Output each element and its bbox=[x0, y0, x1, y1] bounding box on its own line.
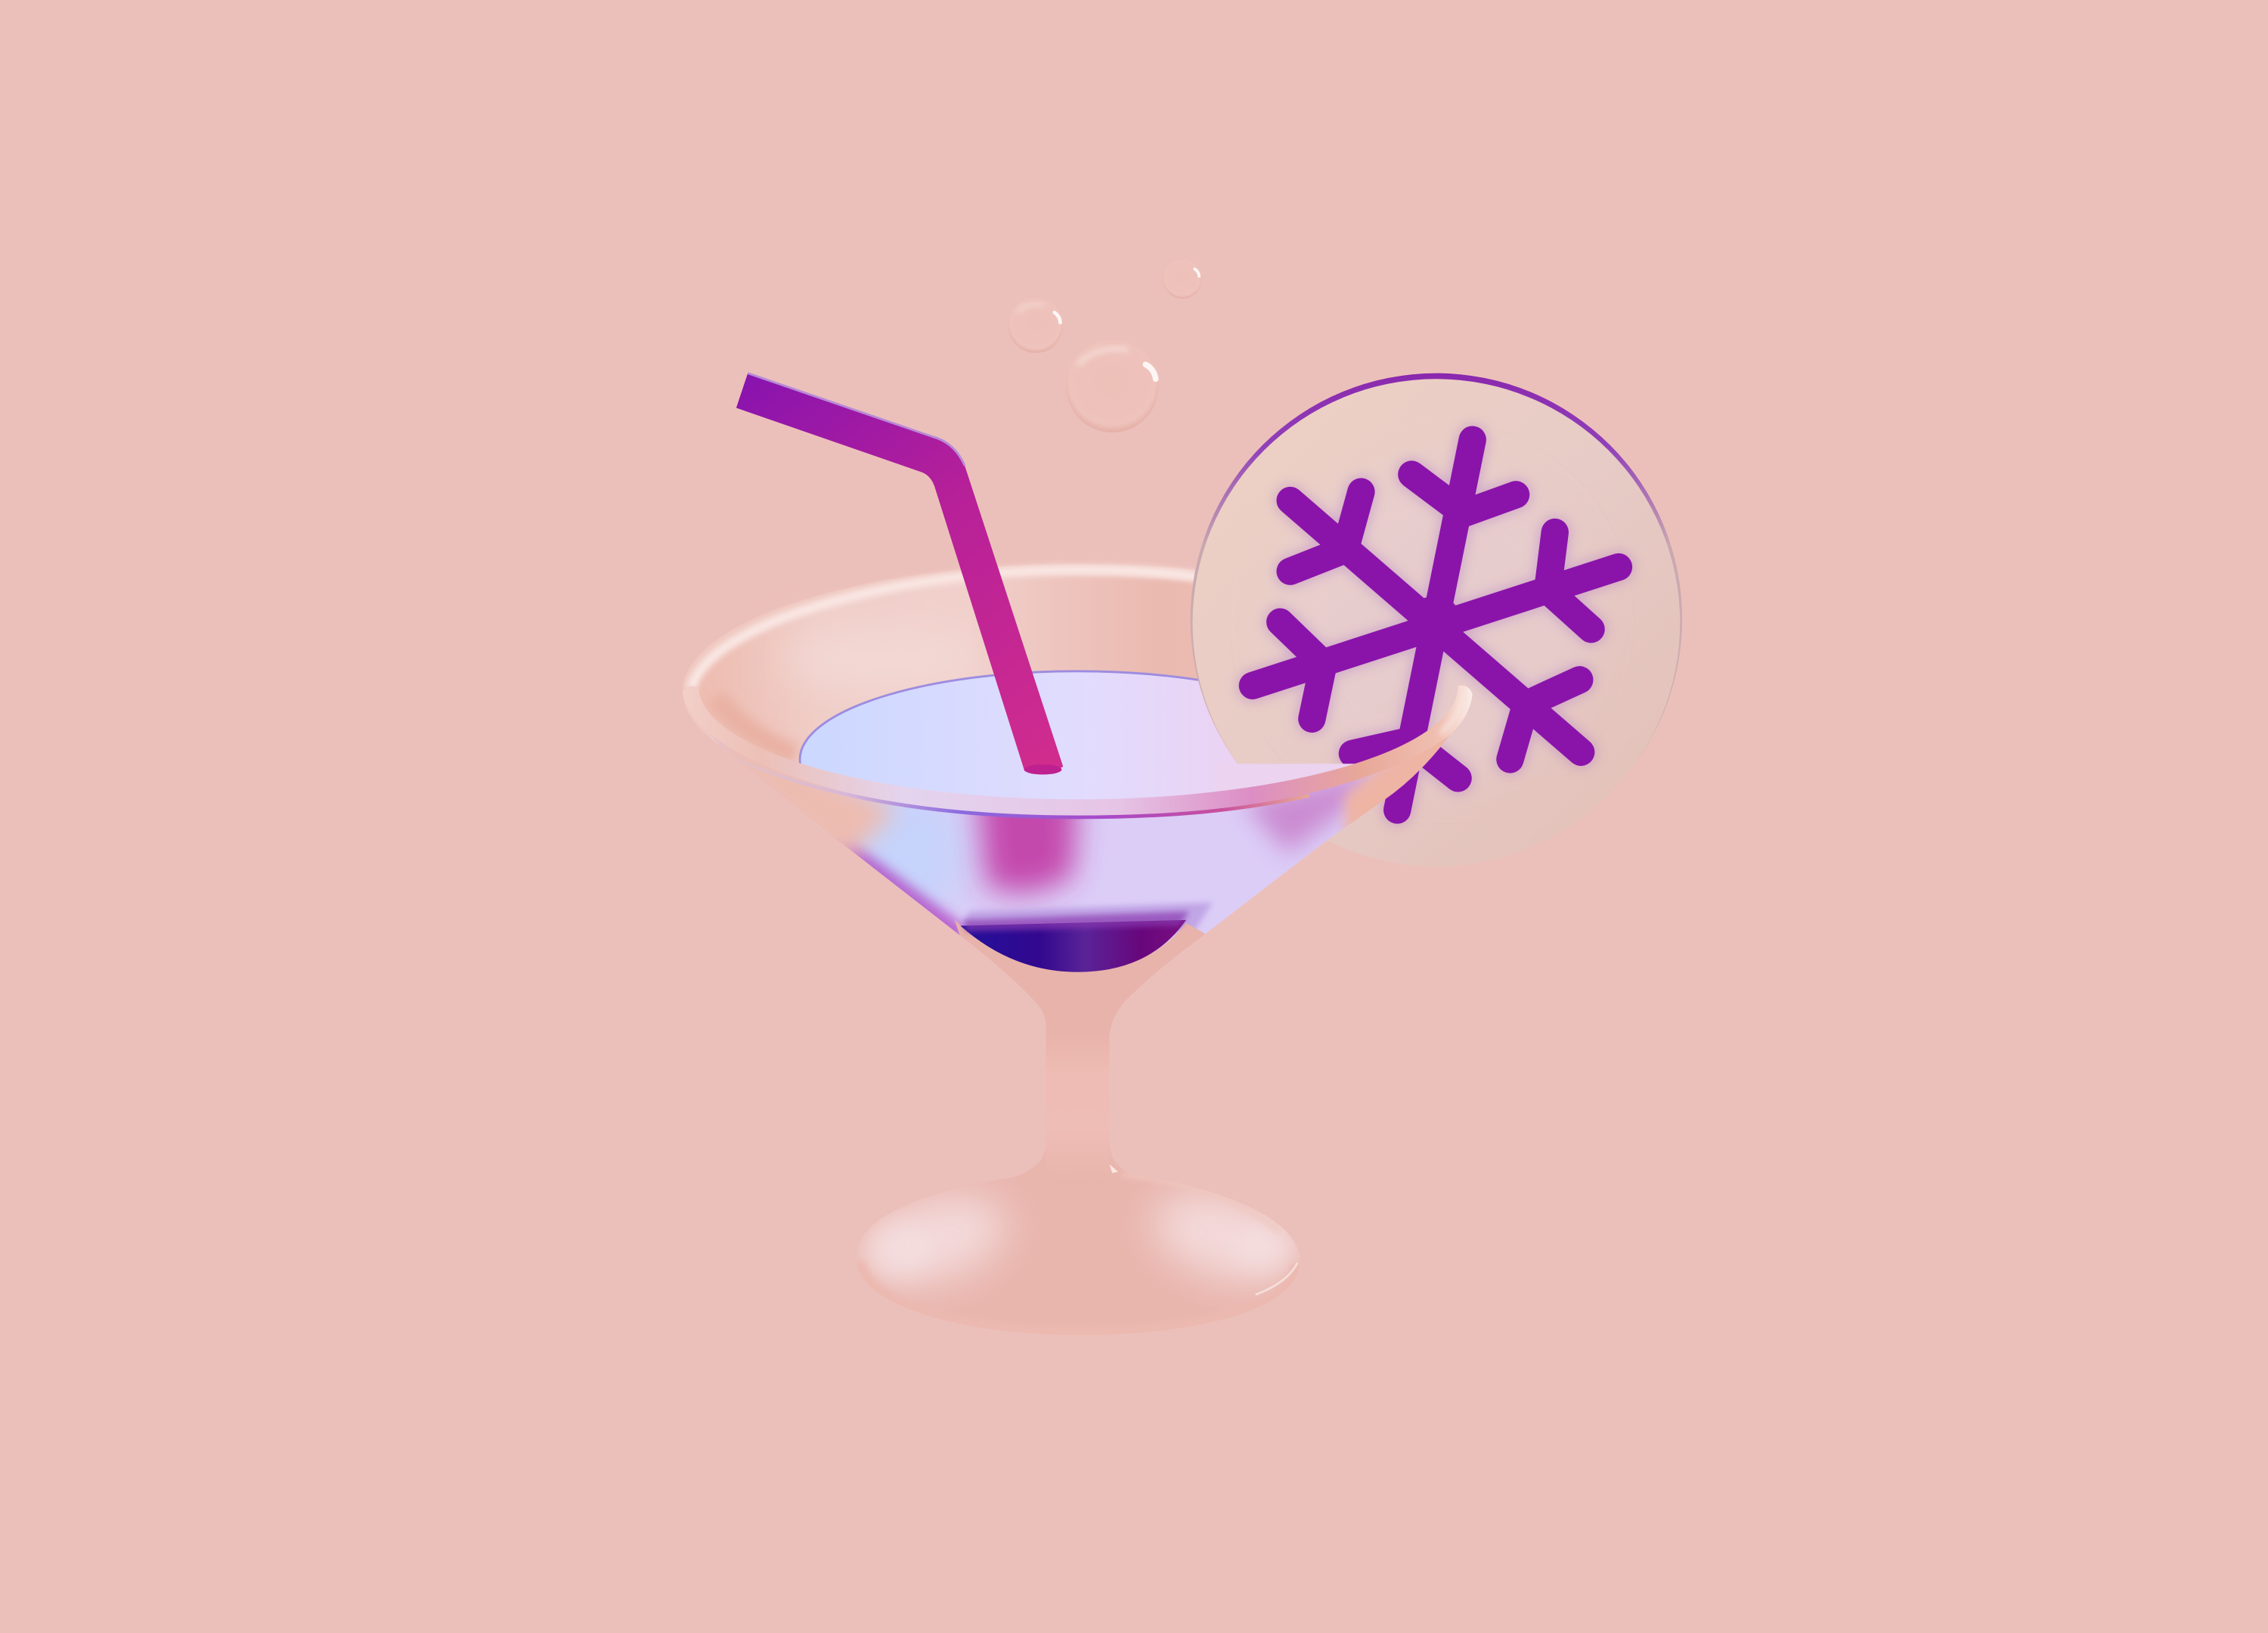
front rim of the glass bbox=[683, 686, 1473, 819]
bubble: medium bbox=[1009, 298, 1063, 353]
foot bbox=[858, 1146, 1299, 1335]
stem bbox=[1046, 1012, 1109, 1183]
cone: right edge tint bbox=[1244, 767, 1389, 854]
liquid surface covering disc bbox=[1237, 764, 1355, 786]
snowflake bbox=[1253, 440, 1619, 810]
cone: straw reflection bbox=[976, 781, 1077, 893]
liquid surface bbox=[798, 670, 1238, 800]
snowflake shadow bbox=[1253, 440, 1619, 810]
snowflake hub bbox=[1408, 596, 1462, 651]
cone: left edge tint bbox=[832, 839, 966, 940]
bowl inner wall bbox=[696, 575, 1459, 807]
cone: dark drink bbox=[960, 920, 1186, 972]
bubble: large bbox=[1066, 340, 1159, 432]
coaster disc with snowflake bbox=[1191, 373, 1682, 866]
back wall bbox=[683, 564, 1473, 819]
disc edge bbox=[1191, 373, 1682, 865]
cone: pink foot of the bowl bbox=[954, 920, 1205, 1036]
straw bbox=[736, 373, 1063, 775]
back rim highlight bbox=[692, 570, 1201, 689]
cone of the glass bbox=[686, 709, 1450, 1036]
bubbles bbox=[1009, 259, 1202, 432]
cone: frosted band bbox=[955, 903, 1212, 940]
cone: blue frost bbox=[854, 803, 968, 907]
disc face bbox=[1192, 379, 1680, 866]
glass foot and stem bbox=[858, 1024, 1299, 1335]
bubble: small bbox=[1163, 259, 1202, 299]
glass bowl back bbox=[683, 564, 1473, 819]
